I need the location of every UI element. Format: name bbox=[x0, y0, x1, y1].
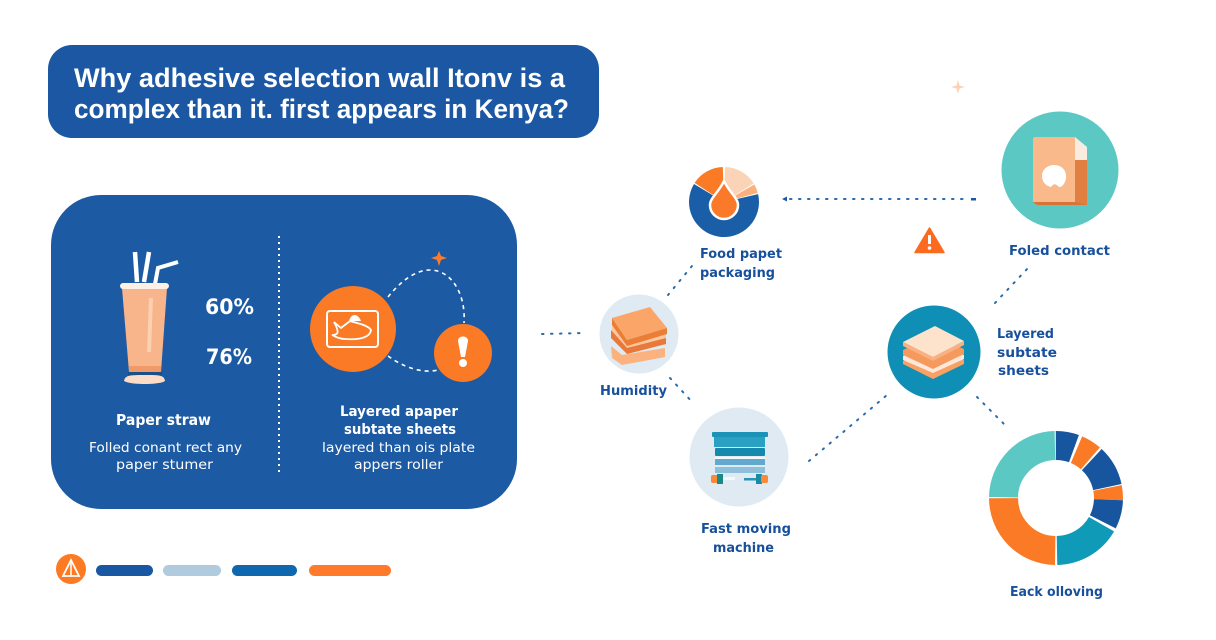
chart: donut bbox=[1004, 446, 1108, 550]
connector: machine to layered bbox=[809, 395, 887, 461]
label: food paper packaging bbox=[700, 247, 782, 281]
heading: paper straw: Paper straw bbox=[116, 411, 211, 429]
label: donut: Eack olloving bbox=[1010, 585, 1103, 600]
icon: small sparkle top right bbox=[951, 80, 965, 94]
text: paper straw description: Folled conant rect any bbox=[89, 441, 242, 456]
text: layered description bbox=[322, 441, 475, 473]
title banner: complex than it. first appears in Kenya? bbox=[74, 94, 569, 124]
icon: substrate sheet in orange circle bbox=[310, 286, 396, 372]
node: humidity bbox=[600, 294, 678, 399]
label: fast moving machine bbox=[701, 522, 791, 556]
text: layered description: layered than ois plate bbox=[322, 441, 475, 456]
stat: 76%: 76% bbox=[206, 345, 252, 369]
icon: orange stacked layers bbox=[600, 294, 678, 374]
node: food paper packaging bbox=[689, 167, 782, 281]
connector: layered to donut bbox=[977, 397, 1007, 427]
label: food paper packaging: packaging bbox=[700, 266, 775, 281]
icon: alert circle bbox=[434, 324, 492, 382]
node: foled contact bbox=[1002, 112, 1118, 259]
label: food paper packaging: Food papet bbox=[700, 247, 782, 262]
connector: layered to foled bbox=[995, 268, 1028, 303]
icon: pie with drop bbox=[689, 167, 759, 237]
icon: orange sparkle bbox=[431, 251, 447, 266]
text: paper straw description: paper stumer bbox=[116, 458, 214, 473]
connector: humidity to machine bbox=[670, 378, 694, 404]
heading: layered paper: subtate sheets bbox=[344, 422, 456, 438]
label: fast moving machine: Fast moving bbox=[701, 522, 791, 537]
label: humidity: Humidity bbox=[600, 384, 668, 399]
icon: paper straw cup bbox=[120, 252, 178, 384]
panel: paper straw and layered sheets bbox=[51, 195, 517, 509]
text: paper straw description bbox=[89, 441, 242, 473]
label: layered substrate sheets: sheets bbox=[998, 364, 1049, 379]
heading: layered paper bbox=[340, 404, 459, 438]
label: layered substrate sheets: subtate bbox=[997, 346, 1057, 361]
icon: folded package bbox=[1002, 112, 1118, 228]
connector: humidity input bbox=[542, 333, 584, 334]
icon: machine rollers bbox=[690, 408, 788, 506]
label: fast moving machine: machine bbox=[713, 541, 774, 556]
icon: legend warning bbox=[56, 554, 86, 584]
stat: 60%: 60% bbox=[205, 295, 254, 319]
icon: warning triangle bbox=[915, 228, 944, 252]
node: layered substrate sheets bbox=[888, 306, 1057, 398]
label: layered substrate sheets: Layered bbox=[997, 327, 1054, 342]
icon: layered sheets bbox=[888, 306, 980, 398]
connector: humidity to food bbox=[668, 266, 692, 295]
text: layered description: appers roller bbox=[354, 458, 444, 473]
icon: dashed loop connector bbox=[388, 270, 464, 371]
arrow: foled contact to food packaging bbox=[782, 196, 976, 202]
legend row bbox=[56, 554, 391, 584]
title banner: Why adhesive selection wall Itonv is a bbox=[74, 63, 566, 93]
heading: layered paper: Layered apaper bbox=[340, 404, 459, 420]
title banner bbox=[48, 45, 599, 138]
label: foled contact: Foled contact bbox=[1009, 244, 1110, 259]
label: layered substrate sheets bbox=[997, 327, 1057, 379]
node: fast moving machine bbox=[690, 408, 791, 556]
